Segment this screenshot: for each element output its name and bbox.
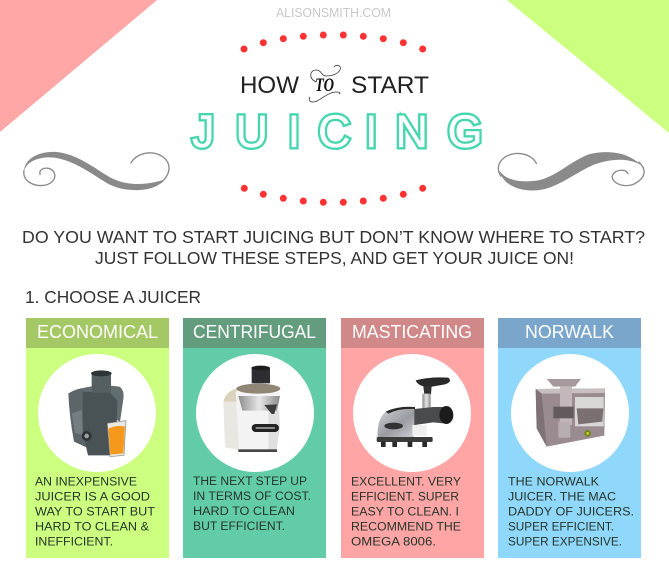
juicer photo: masticating	[353, 354, 471, 472]
panel: economical	[26, 318, 169, 558]
panel: norwalk	[498, 318, 641, 558]
panel header: norwalk: NORWALK	[525, 322, 614, 342]
panel header: centrifugal: CENTRIFUGAL	[193, 322, 316, 342]
green corner triangle	[507, 0, 669, 133]
juicer photo: economical	[38, 354, 156, 472]
description: economical: HARD TO CLEAN &	[35, 520, 150, 534]
panel: centrifugal	[183, 318, 326, 558]
panel header: norwalk	[498, 318, 641, 348]
description: masticating: RECOMMEND THE	[351, 520, 461, 534]
panel header: economical	[26, 318, 169, 348]
heading: how to start: HOW	[240, 72, 299, 99]
juicer photo: norwalk	[511, 354, 629, 472]
heading: how to start: TO	[315, 75, 334, 96]
panel header: economical: ECONOMICAL	[37, 322, 158, 342]
description: economical: INEFFICIENT.	[35, 534, 113, 548]
bottom dotted arc	[241, 185, 426, 206]
description: centrifugal: IN TERMS OF COST.	[193, 489, 311, 503]
description: economical	[35, 474, 155, 548]
intro question text: JUST FOLLOW THESE STEPS, AND GET YOUR JUICE ON!	[95, 248, 574, 268]
step heading: 1. CHOOSE A JUICER	[25, 287, 201, 307]
right flourish	[498, 152, 644, 190]
pink corner triangle	[0, 0, 157, 132]
description: norwalk: SUPER EXPENSIVE.	[508, 534, 622, 548]
heading: how to start: START	[351, 72, 429, 99]
panel header: masticating: MASTICATING	[352, 322, 472, 342]
description: norwalk: SUPER EFFICIENT.	[508, 520, 614, 534]
description: norwalk: JUICER. THE MAC	[508, 490, 616, 504]
intro question text	[22, 227, 645, 268]
description: economical: JUICER IS A GOOD	[35, 490, 150, 504]
description: masticating	[351, 474, 461, 548]
intro question text: DO YOU WANT TO START JUICING BUT DON’T KNOW WHERE TO START?	[22, 227, 645, 247]
description: centrifugal	[193, 474, 311, 533]
panel header: masticating	[341, 318, 484, 348]
description: masticating: EASY TO CLEAN. I	[351, 504, 459, 518]
description: economical: WAY TO START BUT	[35, 504, 155, 518]
heading: juicing outlined letters: JUICING	[192, 106, 483, 157]
description: norwalk: DADDY OF JUICERS.	[508, 504, 634, 518]
description: economical: AN INEXPENSIVE	[35, 474, 137, 488]
description: norwalk: THE NORWALK	[508, 474, 600, 488]
description: centrifugal: THE NEXT STEP UP	[193, 474, 307, 488]
description: centrifugal: HARD TO CLEAN	[193, 504, 295, 518]
panel header: centrifugal	[183, 318, 326, 348]
description: norwalk	[508, 474, 634, 548]
description: centrifugal: BUT EFFICIENT.	[193, 519, 285, 533]
top dotted arc	[240, 32, 426, 52]
heading: juicing outlined letters: JUICING	[192, 106, 483, 157]
description: masticating: EXCELLENT. VERY	[351, 474, 461, 488]
description: masticating: EFFICIENT. SUPER	[351, 490, 459, 504]
panel: masticating	[341, 318, 484, 558]
heading: how to start	[240, 65, 429, 102]
left flourish	[24, 152, 169, 190]
website credit: ALISONSMITH.COM	[276, 6, 391, 20]
juicer photo: centrifugal	[196, 354, 314, 472]
description: masticating: OMEGA 8006.	[351, 534, 436, 548]
